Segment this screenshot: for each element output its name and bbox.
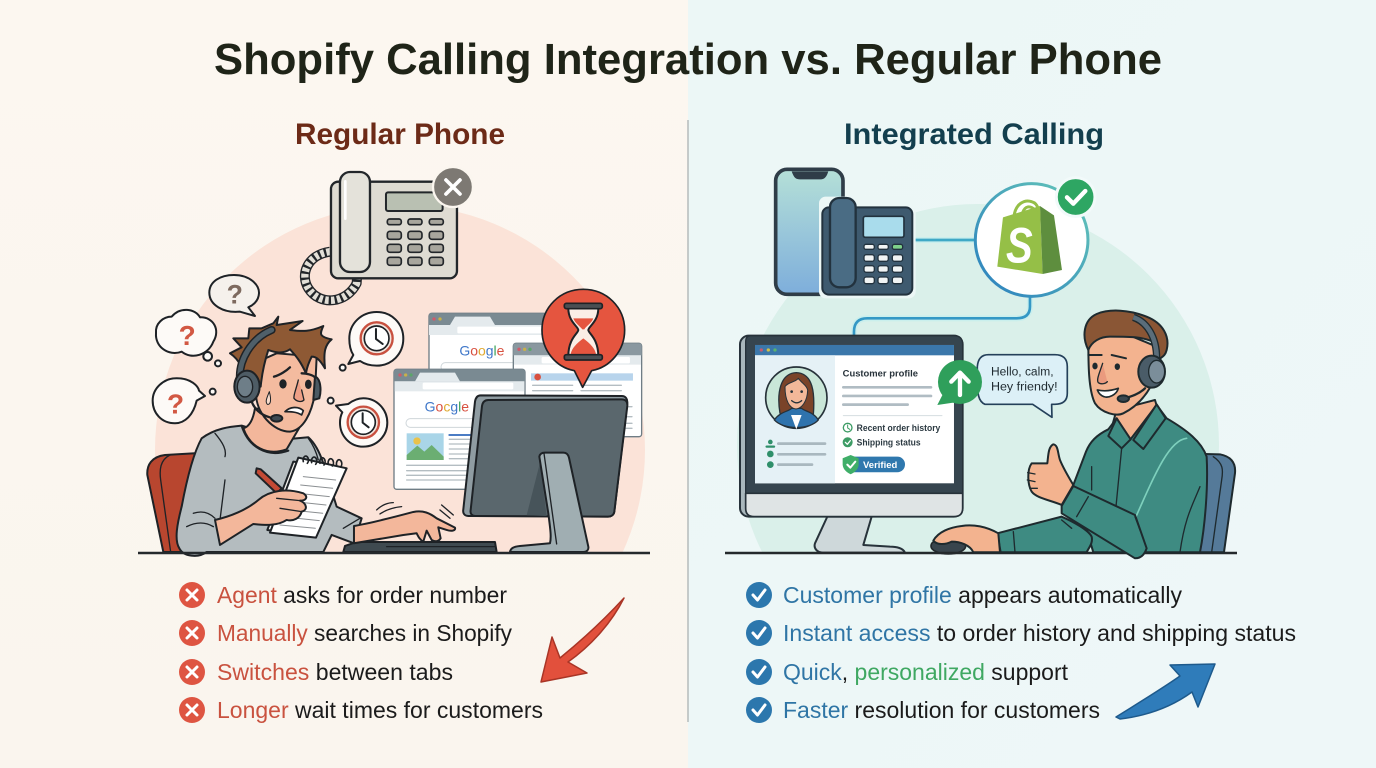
screen: Shipping status	[857, 438, 921, 448]
smartphone	[776, 169, 843, 294]
thumbs up hand	[1028, 444, 1073, 505]
question cloud	[156, 310, 221, 366]
mic	[1123, 388, 1145, 399]
list: integrated calling benefits	[746, 582, 1296, 723]
browser window front	[394, 369, 525, 489]
sleeve upper arm	[1062, 486, 1147, 558]
screen: Recent order history	[857, 423, 940, 433]
screen	[755, 345, 954, 483]
title: Shopify Calling Integration vs. Regular Phone	[214, 35, 1162, 84]
item: quick personalized: Quick, personalized support	[783, 659, 1069, 685]
connector lines	[854, 240, 1030, 337]
neck	[1110, 400, 1160, 447]
chair	[1199, 454, 1235, 552]
image thumbnail	[407, 433, 444, 460]
list: regular phone drawbacks	[179, 582, 543, 723]
face	[1088, 330, 1157, 415]
sweater	[177, 426, 362, 556]
teal desk phone	[819, 197, 916, 298]
verified pill	[843, 455, 905, 474]
arrow: blue upward	[1116, 664, 1215, 719]
Shopify circle with bag: S	[1006, 218, 1033, 274]
question bubble top: ?	[227, 279, 243, 309]
question cloud: ?	[179, 320, 196, 351]
mic	[252, 402, 273, 418]
mouse	[931, 538, 966, 554]
teal backdrop circle	[737, 204, 1219, 552]
hourglass badge	[542, 289, 625, 387]
verified pill: Verified	[863, 460, 897, 470]
keyboard	[343, 542, 497, 552]
sleeve forearm	[997, 517, 1092, 552]
sweat	[266, 392, 271, 404]
illustration: stressed agent with worry bubbles	[147, 275, 497, 556]
browser window front: Gocgle	[425, 398, 469, 414]
speech bubble greeting	[977, 355, 1067, 417]
illustration: happy agent	[933, 311, 1235, 558]
collar	[1108, 418, 1131, 448]
chair	[147, 453, 195, 552]
item: customer profile: Customer profile appears automatically	[783, 582, 1182, 608]
collar	[242, 426, 288, 453]
browser window back: Google	[459, 342, 505, 358]
monitor stand	[510, 453, 588, 552]
headset band	[1133, 317, 1157, 358]
heading: integrated calling: Integrated Calling	[844, 118, 1104, 151]
coiled cord	[305, 252, 357, 300]
green arrow bubble	[937, 360, 982, 405]
panel: integrated calling background	[688, 0, 1376, 768]
notepad	[267, 462, 343, 537]
question bubble lower	[153, 378, 216, 423]
question bubble lower: ?	[167, 388, 184, 419]
ear cup	[1138, 356, 1165, 388]
illustration: computer monitor with customer profile	[740, 336, 1067, 554]
typing arm and hand	[354, 511, 455, 543]
clock bubble lower	[328, 398, 387, 447]
browser window back	[429, 313, 552, 377]
face	[256, 353, 317, 432]
neck	[243, 408, 300, 452]
illustration: browser windows, monitor and hourglass	[394, 289, 642, 552]
item: longer wait: Longer wait times for customers	[217, 697, 543, 723]
pen	[256, 468, 282, 493]
item: faster resolution: Faster resolution for customers	[783, 697, 1100, 723]
shirt torso	[1073, 405, 1207, 552]
monitor body	[740, 336, 963, 517]
speech bubble greeting: Hello, calm,	[991, 364, 1054, 378]
ground line left	[138, 552, 650, 554]
hair	[1085, 311, 1167, 360]
pink backdrop circle	[155, 212, 645, 552]
arrow: red downward	[541, 598, 624, 682]
X badge	[433, 167, 473, 207]
heading: regular phone: Regular Phone	[295, 118, 505, 151]
clock bubble upper	[340, 312, 403, 371]
item: manually searches: Manually searches in Shopify	[217, 620, 512, 646]
ear cup right	[313, 377, 320, 400]
ground line right	[725, 552, 1237, 554]
item: switches tabs: Switches between tabs	[217, 659, 453, 685]
mouth	[285, 407, 303, 415]
speech bubble greeting: Hey friendy!	[991, 379, 1058, 393]
panel: regular phone background	[0, 0, 688, 768]
mouse hand	[933, 525, 1000, 552]
item: instant access: Instant access to order history and shipping status	[783, 620, 1296, 646]
hand holding pen	[215, 491, 306, 545]
browser window right	[513, 343, 642, 437]
nose	[294, 380, 304, 402]
item: agent asks: Agent asks for order number	[217, 582, 507, 608]
illustration: desk phone with X badge	[305, 167, 473, 300]
headband	[240, 330, 272, 380]
Shopify circle with bag	[975, 178, 1095, 296]
question bubble top	[209, 275, 259, 316]
profile text: Customer profile	[843, 369, 918, 379]
monitor stand	[815, 517, 905, 553]
ear cup left	[234, 371, 260, 403]
eyes	[280, 380, 286, 388]
facial features	[1092, 363, 1098, 369]
illustration: phones connected to Shopify	[776, 169, 1095, 337]
brows	[274, 367, 315, 377]
customer avatar	[766, 367, 827, 429]
avatar detail rows	[767, 440, 825, 468]
monitor back	[463, 395, 627, 552]
hair	[230, 317, 332, 387]
